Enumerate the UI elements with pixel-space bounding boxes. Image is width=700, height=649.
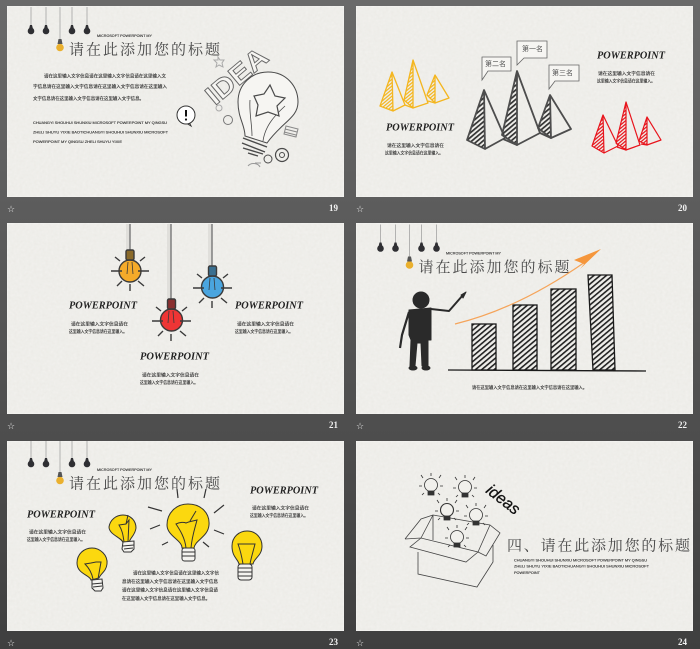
body text: 请在这里输入文字信息请在 (29, 528, 87, 536)
body text: 这里输入文字信息请在这里输入。 (69, 328, 127, 335)
body text: 请在这里输入文字信息请在这里输入文字信息请在这里输入文 (44, 72, 167, 80)
footer: star: ☆ (356, 205, 364, 215)
heading: POWERPOINT (27, 510, 96, 520)
body text (597, 70, 656, 84)
callout: third (549, 65, 579, 89)
body text: ZHELI SHUYU YIXIE BAOTICHUANGYI SHOUHUI SHUNXIU MICROSOFT (514, 564, 650, 568)
body text (122, 570, 220, 602)
callout: first: 第一名 (522, 44, 543, 53)
slide number: 24 (678, 637, 688, 647)
slide 23 (7, 441, 344, 649)
callout: first (517, 41, 547, 65)
icons: small idea bulbs (419, 473, 488, 547)
slide 21 (7, 223, 344, 432)
body text (235, 320, 295, 335)
icon: open box (405, 515, 500, 587)
footer: star: ☆ (7, 422, 15, 432)
body text: 这里输入文字信息请在这里输入。 (250, 512, 308, 519)
slide number: 21 (329, 420, 338, 430)
body text: 息请在这里输入文字信息请在这里输入文字信息 (122, 578, 219, 585)
body text: 请在这里输入文字信息请在 (387, 142, 445, 149)
icon: sketched idea bulb (214, 57, 298, 167)
body text: 请在这里输入文字信息请在 (142, 372, 200, 378)
label: MICROSOFT POWERPOINT MY (97, 34, 153, 38)
slide number: 19 (329, 203, 338, 213)
callout: second: 第二名 (485, 59, 506, 68)
icon: orange bulb (111, 224, 149, 291)
hanging bulbs (28, 7, 90, 51)
footer: star: ☆ (356, 639, 364, 649)
heading: POWERPOINT (140, 352, 210, 362)
body text: 这里输入文字信息请在这里输入。 (27, 536, 85, 543)
body text: 字信息请在这里输入文字信息请在这里输入文字信息请在这里输入 (33, 83, 168, 90)
body text: 在这里输入文字信息请在这里输入文字信息。 (122, 595, 210, 602)
footer: star: ☆ (356, 422, 364, 432)
body text: POWERPOINT (514, 571, 541, 575)
body text: 请在这里输入文字信息请在 (237, 320, 295, 328)
title: 请在此添加您的标题 (69, 40, 220, 58)
icon: stick figure (400, 292, 466, 370)
body text: 请在这里输入文字信息请在 (71, 320, 129, 328)
heading: POWERPOINT (235, 300, 304, 312)
slide 19 (7, 6, 344, 215)
footer: star: ☆ (7, 205, 15, 215)
body text (514, 558, 650, 575)
slide 22 (356, 223, 693, 432)
arrow: growth (455, 249, 601, 324)
dark pyramids (467, 71, 571, 149)
icon: small yellow bulb (109, 515, 136, 552)
title: 请在此添加您的标题 (418, 258, 570, 276)
body text: ZHELI SHUYU YIXIE BAOTICHUANGYI SHOUHUI SHUNXIU MICROSOFT (33, 130, 169, 134)
body text: CHUANGYI SHOUHUI SHUNXIU MICROSOFT POWERPOINT MY QINGSU (33, 121, 167, 125)
bar chart (448, 275, 646, 371)
footer: star: ☆ (7, 639, 15, 649)
icon: left yellow bulb (77, 548, 107, 591)
title: 请在此添加您的标题 (69, 474, 220, 492)
hanging bulbs (28, 441, 90, 484)
icon: red bulb (152, 224, 191, 341)
body text (33, 72, 169, 144)
IDEA lettering: IDEA (200, 41, 274, 111)
label: MICROSOFT POWERPOINT MY (97, 468, 153, 472)
body text (69, 320, 129, 335)
body text: 请在这里输入文字信息请在 (598, 70, 656, 77)
heading: POWERPOINT (597, 50, 666, 62)
body text (27, 528, 87, 543)
body text: 请在这里输入文字信息请在这里输入文字信息请 (122, 586, 219, 594)
hanging bulbs (377, 224, 440, 269)
body text (250, 504, 310, 519)
heading: POWERPOINT (69, 300, 138, 312)
icon: exclamation bubble (177, 106, 195, 126)
body text: 请在这里输入文字信息请在 (252, 504, 310, 512)
callout: third: 第三名 (552, 68, 573, 77)
body text: 文字信息请在这里输入文字信息请在这里输入文字信息。 (33, 95, 144, 102)
body text: 这里输入文字信息请在这里输入。 (385, 150, 443, 156)
icon: blue bulb (193, 224, 232, 308)
body text (385, 142, 445, 156)
body text: 这里输入文字信息请在这里输入。 (235, 328, 293, 335)
red pyramids (592, 102, 661, 153)
slide 24 (356, 441, 693, 649)
body text: 请在这里输入文字信息请在这里输入文字信 (133, 570, 220, 576)
callout: second (482, 57, 511, 80)
body text: POWERPOINT MY QINGSU ZHELI SHUYU YIXIE (33, 140, 123, 144)
slide number: 22 (678, 420, 688, 430)
label: MICROSOFT POWERPOINT MY (446, 252, 502, 256)
body text: 请在这里输入文字信息请在这里输入文字信息请在这里输入。 (472, 384, 587, 391)
ideas lettering: ideas (483, 482, 523, 519)
yellow pyramids (380, 60, 449, 111)
body text: 这里输入文字信息请在这里输入。 (140, 379, 198, 386)
slide 20 (356, 6, 693, 215)
body text (140, 372, 200, 386)
heading: POWERPOINT (386, 122, 455, 134)
heading: POWERPOINT (250, 486, 319, 496)
body text: 这里输入文字信息请在这里输入。 (597, 78, 655, 84)
icon: right yellow bulb (232, 531, 262, 580)
body text: CHUANGYI SHOUHUI SHUNXIU MICROSOFT POWERPOINT MY QINGSU (514, 558, 647, 562)
slide number: 20 (678, 203, 688, 213)
slide number: 23 (329, 637, 338, 647)
icon: large yellow bulb (148, 489, 224, 561)
title: 四、请在此添加您的标题 (507, 536, 690, 554)
